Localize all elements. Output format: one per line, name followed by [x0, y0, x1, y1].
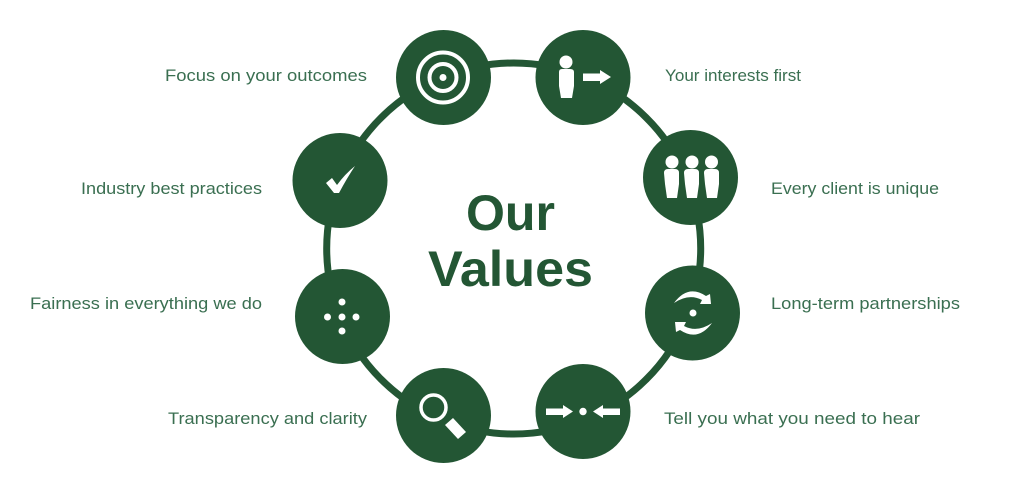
title	[428, 185, 593, 297]
value: tell you what you need to hear	[536, 364, 920, 459]
value: industry best practices	[81, 133, 388, 228]
title: Our	[466, 185, 555, 241]
value: your interests first: Your interests first	[665, 66, 801, 85]
value: long-term partnerships: Long-term partnerships	[771, 294, 960, 313]
value: transparency and clarity	[168, 368, 491, 463]
value: every client is unique: Every client is unique	[771, 179, 939, 198]
value: fairness in everything we do: Fairness in everything we do	[30, 294, 262, 313]
value: your interests first	[536, 30, 801, 125]
value: long-term partnerships	[645, 266, 960, 360]
value: focus on your outcomes: Focus on your outcomes	[165, 66, 367, 85]
value: transparency and clarity: Transparency and clarity	[168, 409, 368, 428]
value: fairness in everything we do	[30, 269, 390, 364]
value: industry best practices: Industry best practices	[81, 179, 262, 198]
value: tell you what you need to hear: Tell you what you need to hear	[664, 409, 920, 428]
value: focus on your outcomes	[165, 30, 491, 125]
connecting ring	[327, 63, 701, 434]
title: Values	[428, 241, 593, 297]
value: every client is unique	[643, 130, 939, 225]
